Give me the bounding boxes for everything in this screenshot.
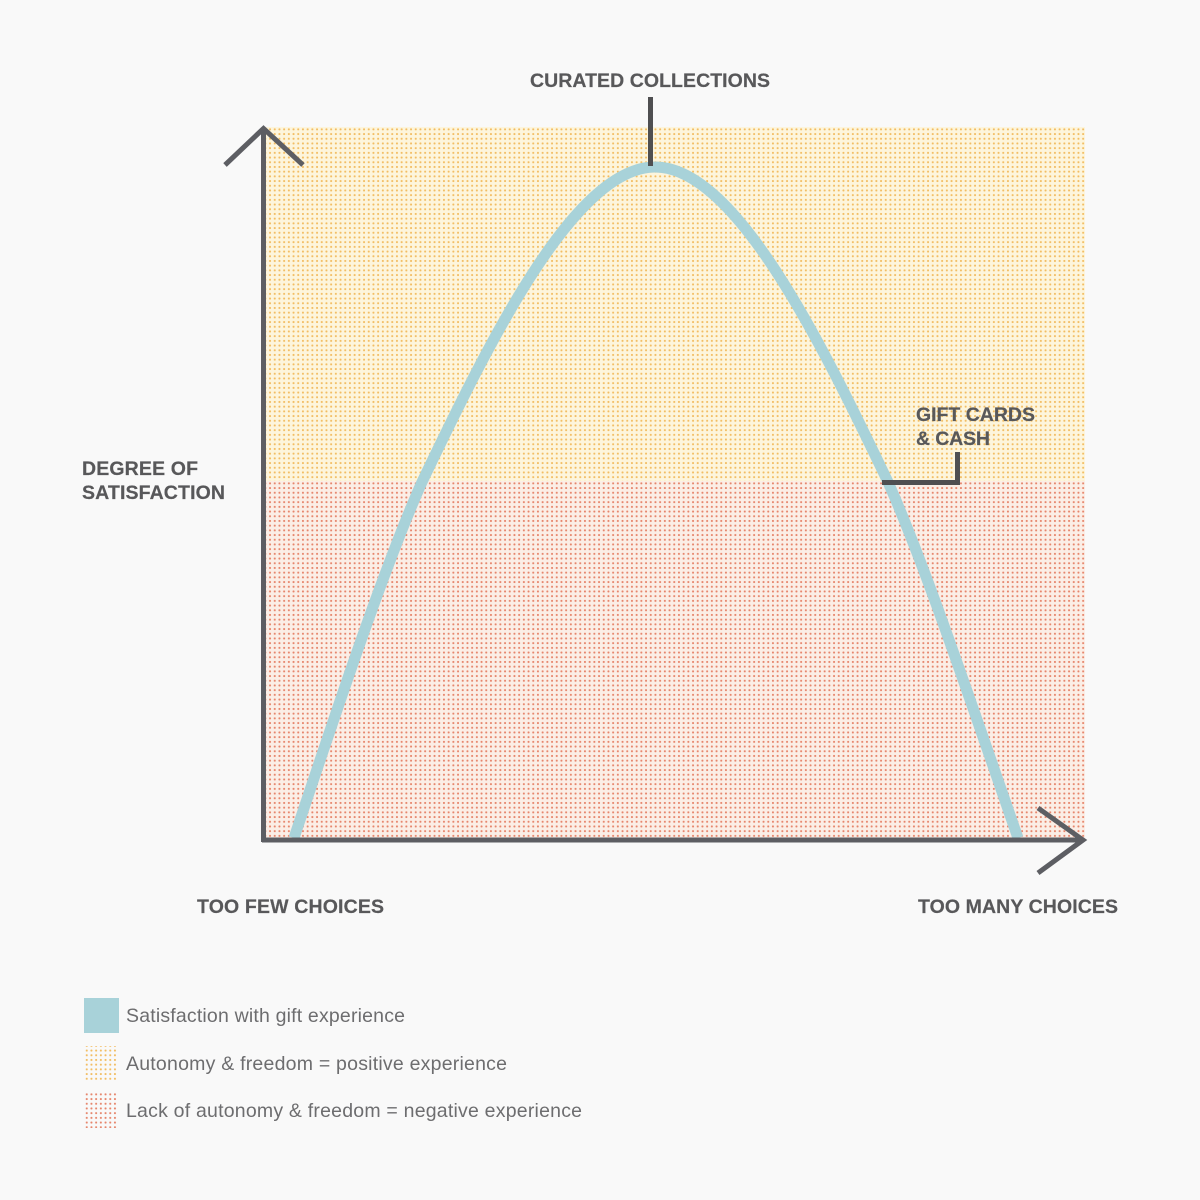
- y axis label: [82, 458, 225, 504]
- legend swatch: positive: [85, 1046, 117, 1080]
- panel: negative zone dotted red: [263, 481, 1085, 838]
- label: gift cards and cash: & CASH: [916, 428, 990, 450]
- label: curated collections: CURATED COLLECTIONS: [530, 70, 770, 92]
- x axis label: too many choices: TOO MANY CHOICES: [918, 896, 1118, 918]
- panel: positive zone dotted yellow: [263, 127, 1085, 481]
- legend swatch: negative: [85, 1093, 117, 1128]
- y axis label: DEGREE OF: [82, 458, 198, 480]
- x axis label: too few choices: TOO FEW CHOICES: [197, 896, 384, 918]
- callout line: gift cards and cash: [882, 452, 958, 482]
- horizontal axis arrow: [262, 808, 1083, 873]
- legend swatch: satisfaction: [84, 998, 119, 1033]
- legend text: positive: Autonomy & freedom = positive experience: [126, 1053, 507, 1075]
- callout line: curated collections: [648, 97, 653, 166]
- legend text: negative: Lack of autonomy & freedom = negative experience: [126, 1100, 582, 1122]
- legend text: satisfaction: Satisfaction with gift experience: [126, 1005, 405, 1027]
- label: gift cards and cash: GIFT CARDS: [916, 404, 1035, 426]
- label: gift cards and cash: [916, 404, 1035, 450]
- legend: [84, 998, 582, 1128]
- vertical axis arrow: [225, 128, 303, 842]
- satisfaction curve: [294, 167, 1018, 838]
- y axis label: SATISFACTION: [82, 482, 225, 504]
